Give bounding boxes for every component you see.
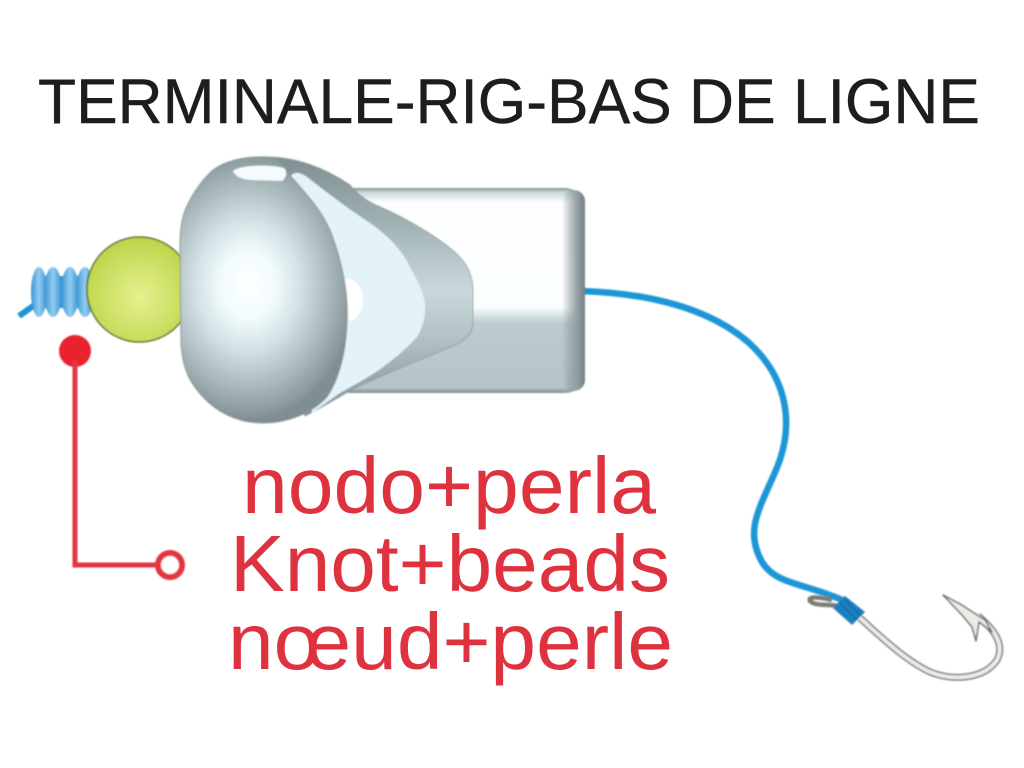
callout text: nœud+perle [228,597,673,686]
fishing line [581,291,842,600]
callout leader [59,335,182,577]
weight eyelet [233,166,286,181]
weight head [180,157,347,423]
title: TERMINALE-RIG-BAS DE LIGNE [38,67,980,137]
hook whipping [833,596,865,625]
hook shank and bend [860,616,1000,677]
weight light facet [290,173,425,413]
callout text: nodo+perla [242,441,657,530]
hook eye [810,597,840,606]
weight highlight [333,279,363,321]
weight body [330,188,585,393]
callout text [228,441,673,686]
icon: bead [87,237,192,342]
icon: hook [810,595,1000,677]
icon: knot coil [19,267,94,317]
icon: lead weight [180,157,585,423]
callout text: Knot+beads [230,519,670,608]
weight cone [250,157,473,416]
hook barb [943,595,992,641]
